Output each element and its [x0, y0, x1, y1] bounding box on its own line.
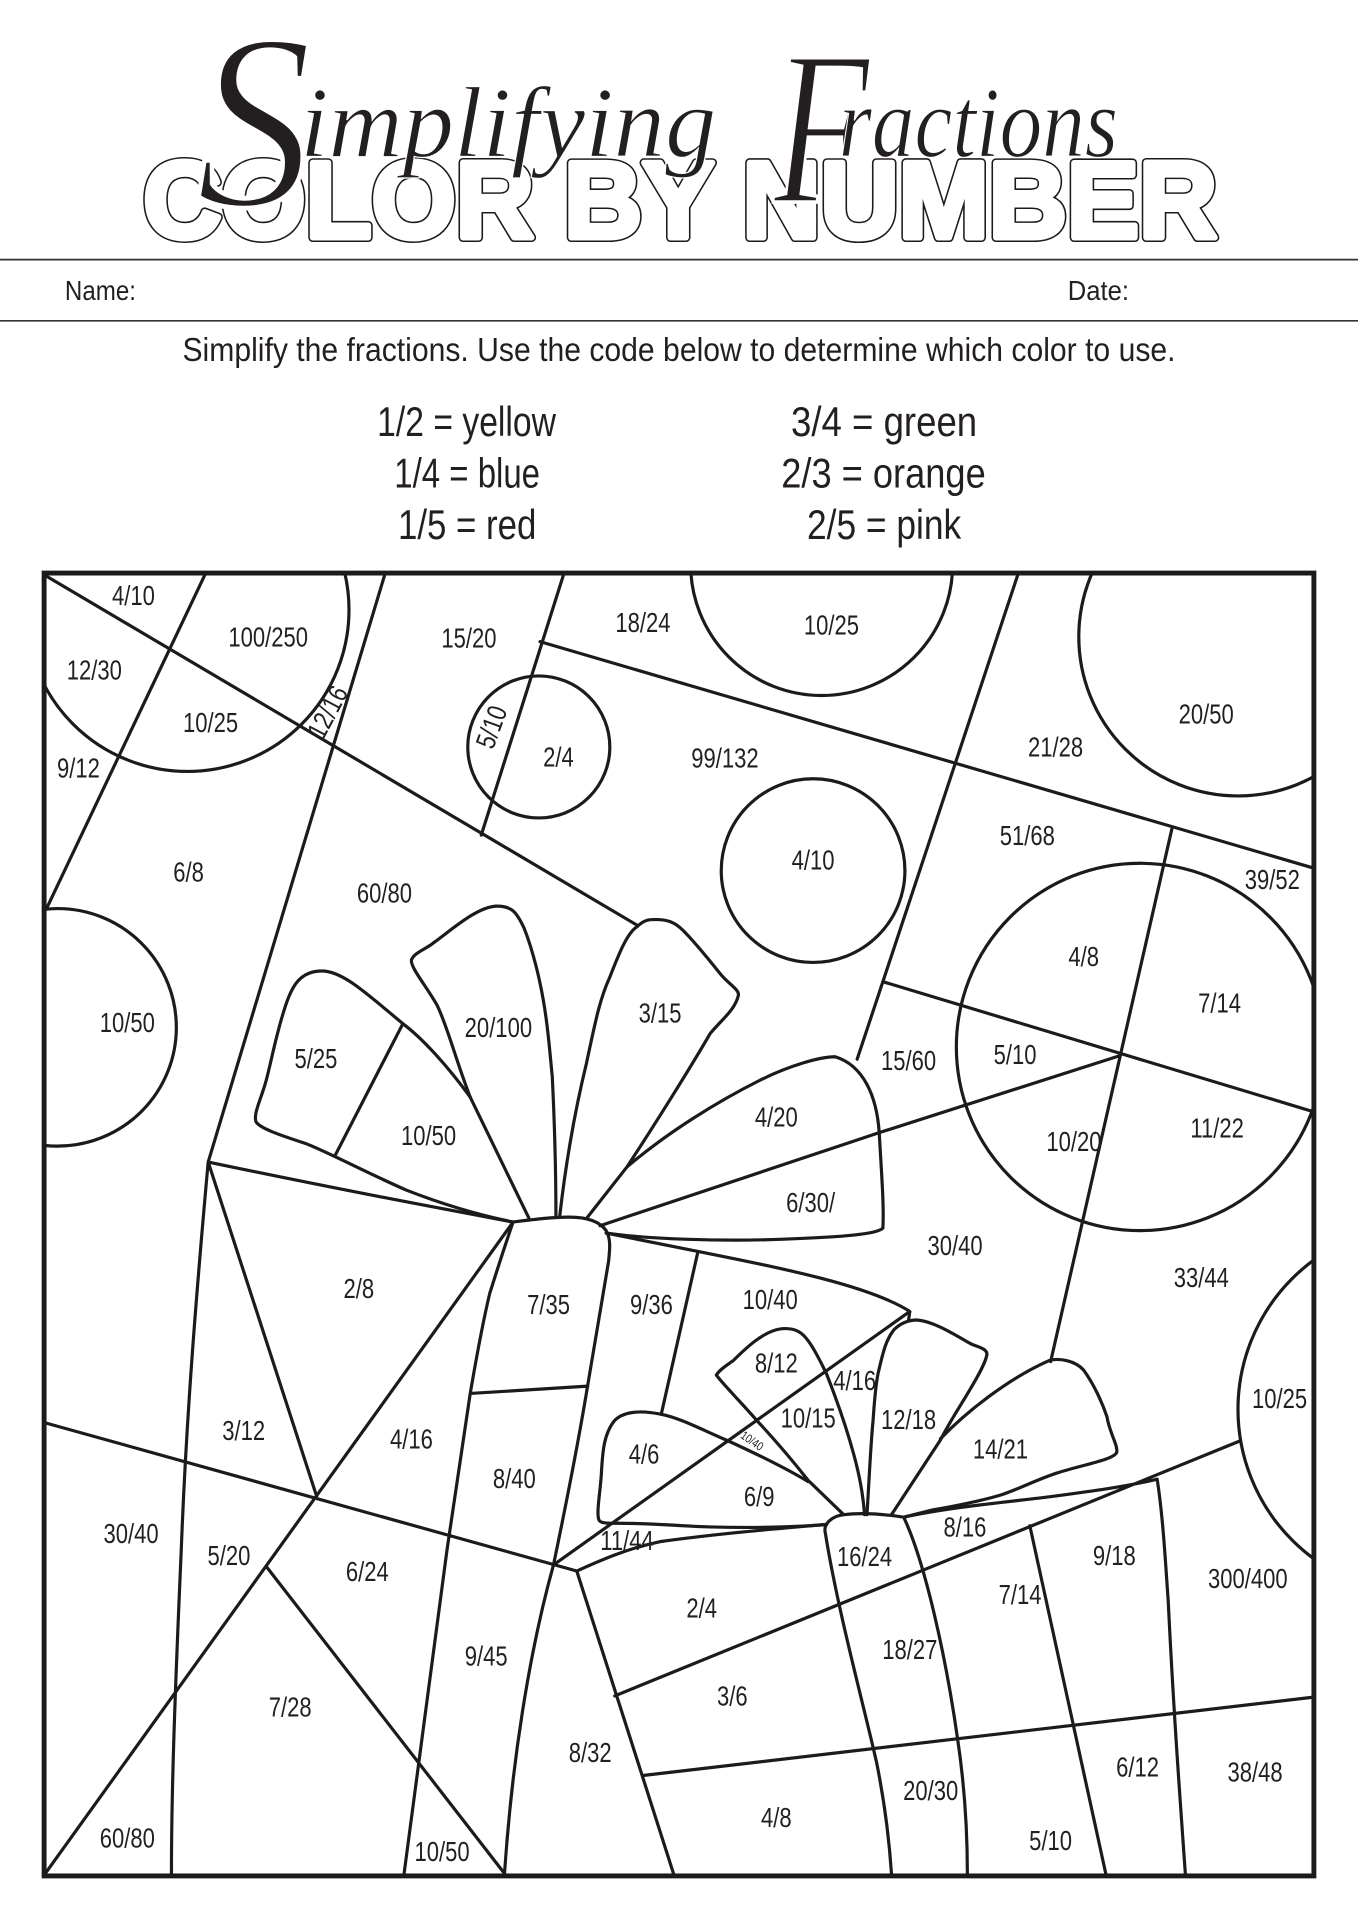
fraction 20/30: 20/30	[903, 1776, 958, 1807]
fraction 10/50: 10/50	[100, 1008, 155, 1039]
fraction 20/100: 20/100	[465, 1013, 532, 1044]
fraction 10/20: 10/20	[1046, 1127, 1101, 1158]
fraction 14/21: 14/21	[973, 1434, 1028, 1465]
fraction 6/8: 6/8	[173, 857, 204, 888]
panel: color by number picture	[42, 570, 1316, 1878]
fraction 10/15: 10/15	[781, 1403, 836, 1434]
fraction 4/6: 4/6	[629, 1439, 659, 1470]
fraction 12/18: 12/18	[881, 1405, 936, 1436]
circle big right	[956, 863, 1324, 1231]
center ribbon	[404, 1217, 610, 1873]
fraction 60/80: 60/80	[100, 1823, 155, 1854]
petal 3/15	[560, 920, 738, 1218]
key: green: 3/4 = green	[791, 398, 977, 445]
background lines	[45, 573, 1314, 1873]
color code key	[377, 398, 986, 548]
fraction 2/8: 2/8	[343, 1274, 374, 1305]
fraction 8/12: 8/12	[755, 1348, 798, 1379]
key: red: 1/5 = red	[398, 501, 536, 548]
key: pink: 2/5 = pink	[807, 501, 961, 548]
circle top right	[1077, 576, 1312, 798]
fraction 5/20: 5/20	[208, 1541, 250, 1572]
fraction labels	[57, 581, 1307, 1868]
fraction 3/15: 3/15	[639, 998, 681, 1029]
fraction 7/35: 7/35	[527, 1290, 570, 1321]
date field: Date:	[1068, 275, 1129, 306]
circle top left	[46, 576, 351, 773]
fraction 8/16: 8/16	[943, 1512, 986, 1543]
key: yellow: 1/2 = yellow	[377, 398, 557, 445]
circle left	[46, 907, 178, 1148]
fraction 21/28: 21/28	[1028, 732, 1083, 763]
petal 20/100	[411, 906, 556, 1218]
fraction 6/12: 6/12	[1116, 1752, 1159, 1783]
fraction 11/22: 11/22	[1190, 1113, 1244, 1144]
title: simplifying fractions: implifying	[300, 68, 716, 179]
fraction 7/14: 7/14	[999, 1580, 1042, 1611]
fraction 4/8: 4/8	[1068, 942, 1099, 973]
circle top middle	[690, 576, 954, 698]
instructions: Simplify the fractions. Use the code below to determine which color to use.	[182, 332, 1176, 369]
title: simplifying fractions: ractions	[839, 68, 1118, 179]
fraction 3/12: 3/12	[222, 1416, 265, 1447]
fraction 20/50: 20/50	[1179, 699, 1234, 730]
fraction 300/400: 300/400	[1208, 1564, 1288, 1595]
fraction 4/20: 4/20	[755, 1102, 798, 1133]
fraction 10/25: 10/25	[183, 708, 238, 739]
fraction 5/10: 5/10	[1029, 1826, 1072, 1857]
fraction 7/28: 7/28	[269, 1692, 312, 1723]
fraction 5/25: 5/25	[294, 1043, 337, 1074]
petal 8/12 and 10/15	[716, 1329, 865, 1515]
fraction 6/24: 6/24	[346, 1557, 389, 1587]
fraction 4/10: 4/10	[112, 581, 155, 612]
middle lines	[553, 1233, 910, 1873]
fraction 39/52: 39/52	[1245, 865, 1300, 896]
title: color by number: COLOR BY NUMBER	[143, 140, 1217, 262]
fraction 12/16 rotated: 12/16	[301, 681, 355, 744]
key: orange: 2/3 = orange	[781, 449, 986, 496]
background shapes: straight lines and circles	[46, 576, 1312, 1874]
fraction 10/50: 10/50	[401, 1121, 456, 1152]
fraction 5/10 rotated: 5/10	[470, 702, 514, 753]
fraction 10/25: 10/25	[1252, 1384, 1307, 1415]
fraction 60/80: 60/80	[357, 878, 412, 909]
fraction 10/50: 10/50	[414, 1837, 470, 1868]
header rules	[0, 260, 1358, 321]
fraction 38/48: 38/48	[1228, 1757, 1283, 1788]
fraction 30/40: 30/40	[928, 1231, 983, 1262]
fraction 8/32: 8/32	[569, 1738, 612, 1769]
fraction 99/132: 99/132	[691, 743, 759, 774]
fraction 6/9: 6/9	[744, 1482, 775, 1513]
fraction 2/4: 2/4	[686, 1593, 717, 1624]
circle bottom right	[1236, 1260, 1312, 1559]
fraction 4/16: 4/16	[833, 1366, 876, 1396]
fraction 18/27: 18/27	[882, 1635, 937, 1666]
name field: Name:	[65, 275, 136, 306]
outer frame	[44, 573, 1314, 1876]
fraction 51/68: 51/68	[1000, 821, 1055, 852]
gift box	[615, 1441, 1314, 1873]
fraction 11/44: 11/44	[600, 1526, 654, 1557]
fraction 4/8: 4/8	[761, 1803, 792, 1834]
fraction 5/10: 5/10	[994, 1040, 1037, 1071]
fraction 4/10: 4/10	[792, 845, 835, 876]
circle center	[721, 779, 905, 962]
fraction 7/14: 7/14	[1198, 988, 1241, 1019]
fraction 15/60: 15/60	[881, 1046, 936, 1077]
petal 4/6 and 6/9	[598, 1412, 827, 1527]
fraction 9/18: 9/18	[1093, 1541, 1136, 1572]
circle small	[468, 676, 610, 818]
fraction 30/40: 30/40	[103, 1519, 159, 1549]
fraction 15/20: 15/20	[441, 623, 497, 654]
fraction 33/44: 33/44	[1174, 1263, 1229, 1294]
small bow	[598, 1320, 1117, 1527]
petal 12/18	[867, 1320, 987, 1515]
petal 14/21	[904, 1360, 1117, 1517]
title: simplifying fractions: F	[735, 6, 871, 250]
gift lines	[615, 1441, 1314, 1873]
fraction 10/40: 10/40	[743, 1285, 798, 1316]
fraction 12/30: 12/30	[67, 655, 122, 686]
large bow	[255, 906, 883, 1240]
title: color by number: COLOR BY NUMBER	[143, 140, 1217, 262]
fraction 8/40: 8/40	[493, 1463, 536, 1494]
gift ribbon	[825, 1514, 967, 1873]
fraction 10/40 tiny: 10/40	[738, 1429, 765, 1454]
fraction 18/24: 18/24	[615, 608, 671, 638]
fraction 16/24: 16/24	[837, 1542, 892, 1573]
fraction 3/6: 3/6	[717, 1681, 748, 1712]
fraction 2/4: 2/4	[543, 742, 574, 773]
fraction 4/16: 4/16	[390, 1424, 433, 1455]
fraction 9/12: 9/12	[57, 753, 100, 784]
key: blue: 1/4 = blue	[394, 449, 540, 496]
fraction 6/30/: 6/30/	[786, 1188, 835, 1219]
fraction 10/25: 10/25	[804, 610, 859, 641]
fraction 9/45: 9/45	[465, 1641, 508, 1672]
fraction 100/250: 100/250	[228, 622, 308, 653]
fraction 9/36: 9/36	[630, 1290, 673, 1321]
petal 4/20 and 6/30	[606, 1057, 883, 1240]
petal 5/25 and 10/50	[255, 971, 513, 1222]
